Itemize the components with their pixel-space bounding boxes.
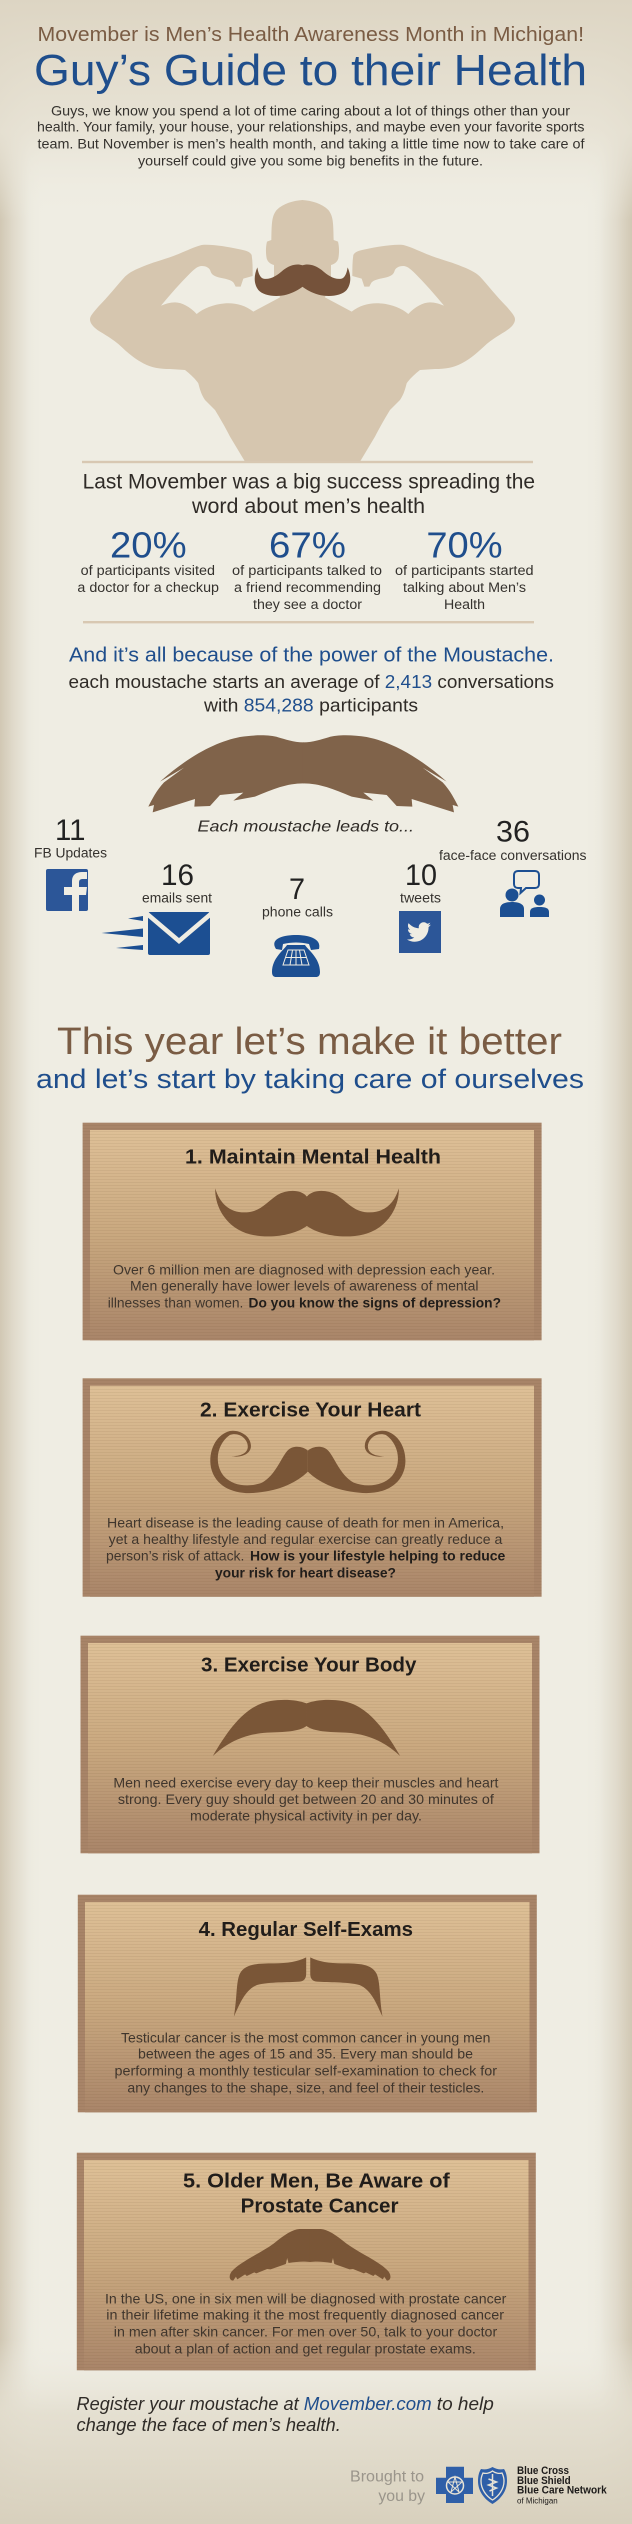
logo text: Blue Cross Blue Shield Blue Care Network of Michigan: Blue Shield — [517, 2475, 571, 2487]
panel text: performing a monthly testicular self-examination to check for — [114, 2062, 497, 2078]
stat: 20% — [77, 525, 219, 595]
panel heading: Prostate Cancer — [241, 2196, 399, 2218]
icon: feathered moustache — [230, 2229, 390, 2281]
intro text block: team. But November is men’s health month, and taking a little time now to take care of — [38, 135, 585, 151]
emails sent — [102, 859, 212, 955]
stat: 67%: a friend recommending — [234, 580, 381, 595]
sponsor text: Brought to — [350, 2469, 424, 2486]
stat: 20%: 20% — [110, 525, 187, 566]
heading: last Movember: Last Movember was a big success spreading the — [83, 470, 535, 493]
panel text: between the ages of 15 and 35. Every man should be — [138, 2045, 473, 2061]
heading: last Movember — [83, 470, 535, 518]
panel text: moderate physical activity in per day. — [190, 1808, 422, 1824]
panel text: Do you know the signs of depression? — [248, 1294, 501, 1310]
panel: 5 prostate — [77, 2153, 536, 2370]
panel heading: 3. Exercise Your Body — [201, 1655, 417, 1677]
subheading: take care of ourselves: and let’s start by taking care of ourselves — [36, 1064, 584, 1094]
intro text block: Guys, we know you spend a lot of time caring about a lot of things other than your — [51, 102, 570, 118]
FB updates — [34, 814, 107, 911]
sponsor text: you by — [378, 2488, 425, 2505]
heading: last Movember: word about men’s health — [191, 495, 425, 518]
sponsor text — [350, 2469, 425, 2505]
FB updates: FB Updates — [34, 846, 107, 861]
phone calls — [262, 873, 333, 977]
icon: curled moustache — [210, 1431, 405, 1493]
text block: conversations: with 854,288 participants — [203, 696, 418, 716]
panel text — [113, 1775, 499, 1824]
panel text: person’s risk of attack. — [106, 1548, 244, 1564]
logo: Blue Shield — [478, 2467, 507, 2504]
stat: 20%: of participants visited — [81, 563, 215, 578]
stat: 20%: a doctor for a checkup — [77, 580, 219, 595]
stat: 70%: talking about Men’s — [403, 580, 526, 595]
text block: conversations — [68, 672, 554, 716]
panel text — [106, 1515, 506, 1580]
panel: 4 self-exams — [78, 1895, 537, 2112]
panel text: about a plan of action and get regular prostate exams. — [135, 2340, 476, 2356]
call to action: change the face of men’s health. — [76, 2415, 341, 2435]
call to action: to help — [437, 2394, 494, 2414]
tweets: tweets — [400, 891, 441, 906]
text block: conversations: each moustache starts an average of 2,413 conversations — [68, 672, 554, 692]
icon: telephone — [272, 935, 320, 977]
panel heading: 4. Regular Self-Exams — [199, 1919, 413, 1941]
logo text: Blue Cross Blue Shield Blue Care Network of Michigan: of Michigan — [517, 2496, 558, 2505]
stat: 67%: 67% — [269, 525, 346, 566]
icon: twitter — [399, 911, 441, 953]
panel text: in men after skin cancer. For men over 50, talk to your doctor — [114, 2323, 498, 2339]
panel text: any changes to the shape, size, and feel of their testicles. — [127, 2079, 484, 2095]
panel text: Men generally have lower levels of awareness of mental — [130, 1278, 478, 1294]
face-face conversations: 36 — [496, 816, 530, 849]
logo text: Blue Cross Blue Shield Blue Care Network of Michigan: Blue Cross — [517, 2465, 569, 2477]
stat: 70%: 70% — [426, 525, 503, 566]
panel text — [114, 2029, 497, 2095]
icon: envelope — [102, 912, 212, 955]
panel text — [108, 1261, 501, 1310]
panel text: in their lifetime making it the most frequently diagnosed cancer — [106, 2306, 504, 2322]
logo text: Blue Cross Blue Shield Blue Care Network of Michigan — [517, 2465, 608, 2505]
intro text block: yourself could give you some big benefits in the future. — [138, 152, 483, 168]
title: Guy’s Guide to their Health — [34, 46, 587, 95]
stat: 70% — [395, 525, 534, 612]
panel text: In the US, one in six men will be diagnosed with prostate cancer — [105, 2290, 507, 2306]
heading: this year: This year let’s make it better — [57, 1021, 562, 1063]
emails sent: 16 — [161, 859, 194, 892]
intro text block: health. Your family, your house, your relationships, and maybe even your favorite sports — [37, 119, 584, 135]
call to action: Movember.com — [304, 2394, 432, 2414]
panel heading: 2. Exercise Your Heart — [200, 1400, 421, 1422]
panel text: How is your lifestyle helping to reduce — [250, 1548, 506, 1564]
face-face conversations: face-face conversations — [439, 848, 587, 863]
heading: power of the moustache: And it’s all because of the power of the Moustache. — [69, 645, 554, 667]
panel text: yet a healthy lifestyle and regular exercise can greatly reduce a — [109, 1531, 503, 1547]
call to action — [76, 2394, 494, 2435]
panel: 1 mental health — [83, 1123, 542, 1340]
panel text: Testicular cancer is the most common cancer in young men — [121, 2029, 490, 2045]
icon: people talking — [500, 871, 549, 917]
panel text — [105, 2290, 507, 2356]
phone calls: 7 — [289, 873, 305, 906]
FB updates: 11 — [55, 814, 86, 847]
moustache on figure — [255, 265, 350, 296]
stat: 67% — [232, 525, 382, 612]
stat: 67%: they see a doctor — [253, 597, 363, 612]
icon: wide moustache — [213, 1700, 400, 1756]
illustration: muscular man silhouette with moustache — [90, 200, 515, 462]
panel text: Men need exercise every day to keep their muscles and heart — [113, 1775, 499, 1791]
tweets — [399, 859, 441, 953]
panel text: Over 6 million men are diagnosed with depression each year. — [113, 1261, 495, 1277]
stat: 67%: of participants talked to — [232, 563, 382, 578]
emails sent: emails sent — [142, 891, 212, 906]
face-face conversations — [439, 816, 587, 917]
phone calls: phone calls — [262, 905, 333, 920]
call to action: Register your moustache at — [76, 2394, 300, 2414]
logo: Blue Cross — [436, 2467, 473, 2503]
panel text: Heart disease is the leading cause of death for men in America, — [107, 1515, 504, 1531]
panel: 3 body — [80, 1636, 540, 1853]
intro text block — [37, 102, 585, 168]
icon: moustache — [215, 1188, 399, 1236]
icon: horseshoe moustache — [234, 1957, 383, 2017]
tweets: 10 — [405, 859, 437, 892]
panel text: your risk for heart disease? — [215, 1564, 396, 1580]
panel: 2 heart — [83, 1378, 542, 1597]
stat: 70%: Health — [444, 597, 485, 612]
illustration: large moustache — [148, 735, 458, 812]
icon: facebook — [46, 869, 88, 911]
stat: 70%: of participants started — [395, 563, 534, 578]
panel text: strong. Every guy should get between 20 and 30 minutes of — [118, 1791, 494, 1807]
panel text: illnesses than women. — [108, 1294, 243, 1310]
heading: Movember subtitle: Movember is Men’s Health Awareness Month in Michigan! — [38, 24, 584, 46]
panel heading: 5. Older Men, Be Aware of — [183, 2171, 450, 2193]
caption: each moustache leads to: Each moustache leads to... — [198, 819, 414, 836]
panel heading: 1. Maintain Mental Health — [185, 1146, 441, 1168]
logo text: Blue Cross Blue Shield Blue Care Network of Michigan: Blue Care Network — [517, 2485, 608, 2497]
panel heading — [183, 2171, 450, 2218]
